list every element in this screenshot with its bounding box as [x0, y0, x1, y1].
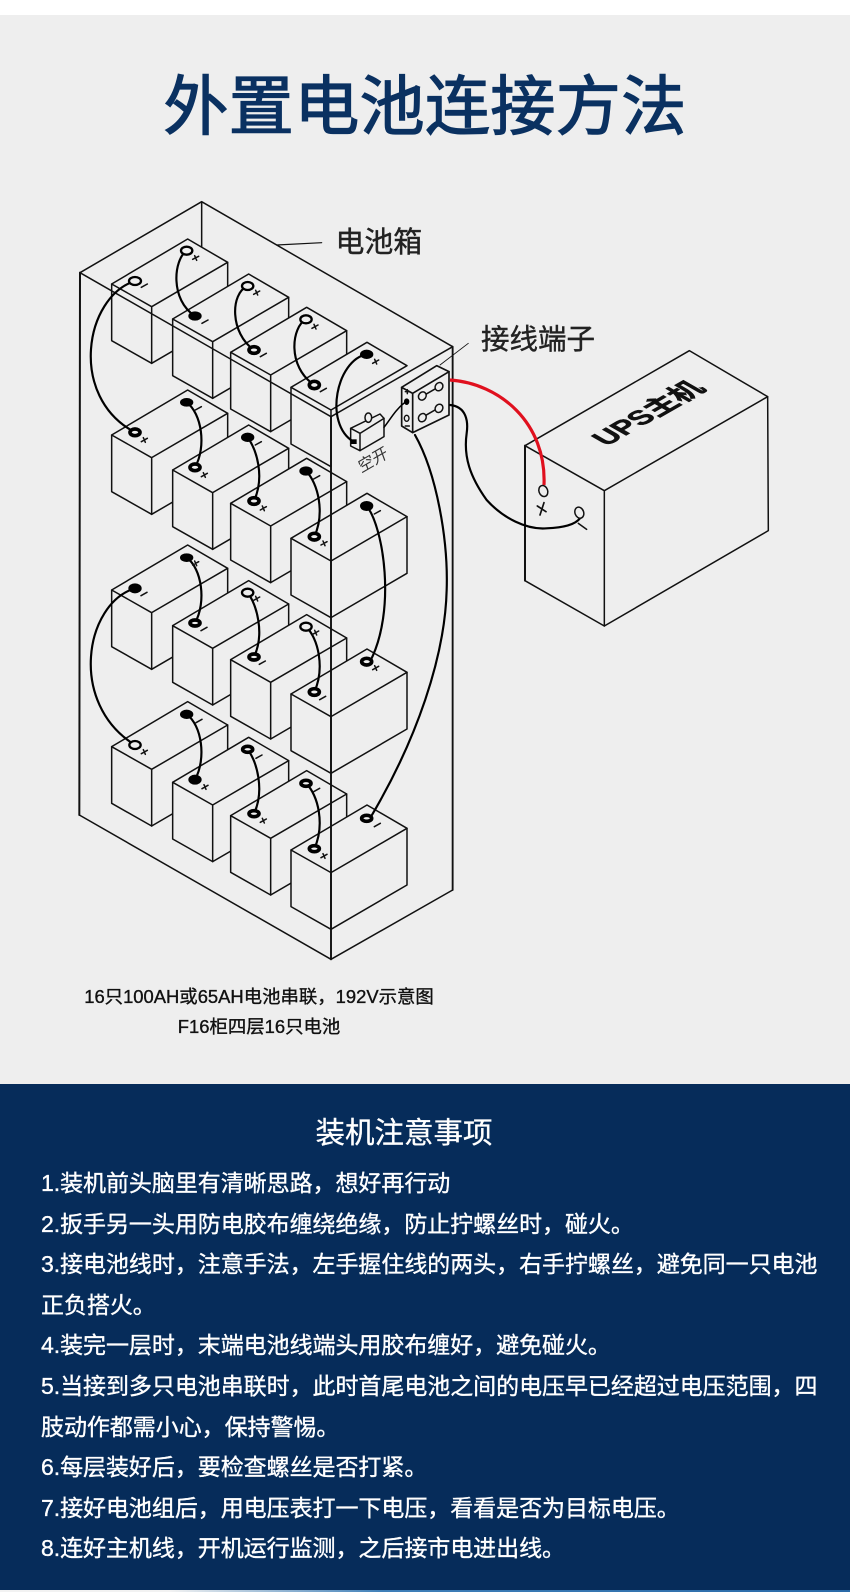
terminal block — [402, 366, 449, 433]
polarity marks — [141, 256, 380, 858]
note 5: 5.当接到多只电池串联时，此时首尾电池之间的电压早已经超过电压范围，四 — [41, 1373, 817, 1399]
bottom gradient strip — [0, 1590, 850, 1592]
panel: diagram background — [0, 15, 850, 1084]
battery cables — [91, 251, 447, 849]
caption line 2: F16柜四层16只电池 — [178, 1016, 340, 1037]
title: 外置电池连接方法 — [163, 70, 687, 143]
note 2: 2.扳手另一头用防电胶布缠绕绝缘，防止拧螺丝时，碰火。 — [41, 1211, 634, 1237]
breaker — [351, 413, 384, 451]
caption line 1: 16只100AH或65AH电池串联，192V示意图 — [84, 986, 434, 1007]
note 4: 4.装完一层时，末端电池线端头用胶布缠好，避免碰火。 — [41, 1332, 611, 1358]
note 5: 肢动作都需小心，保持警惕。 — [41, 1414, 339, 1440]
label: terminal: 接线端子 — [481, 324, 595, 356]
note 7: 7.接好电池组后，用电压表打一下电压，看看是否为目标电压。 — [41, 1495, 680, 1521]
notes heading: 装机注意事项 — [315, 1117, 492, 1150]
note 6: 6.每层装好后，要检查螺丝是否打紧。 — [41, 1454, 427, 1480]
notes list — [41, 1170, 817, 1561]
note 1: 1.装机前头脑里有清晰思路，想好再行动 — [41, 1170, 450, 1196]
negative cable — [450, 405, 580, 528]
panel: installation notes — [0, 1084, 850, 1590]
cabinet back edges — [80, 202, 453, 347]
battery row 4 — [112, 702, 407, 929]
battery row 1 — [112, 239, 407, 467]
note 3: 3.接电池线时，注意手法，左手握住线的两头，右手拧螺丝，避免同一只电池 — [41, 1251, 817, 1277]
UPS label: UPS主机 — [585, 376, 713, 450]
leader lines — [277, 243, 468, 365]
label: battery box: 电池箱 — [336, 227, 422, 259]
battery row 3 — [112, 545, 407, 773]
UPS negative port — [573, 506, 587, 529]
label: breaker: 空开 — [356, 444, 390, 477]
UPS unit — [525, 351, 768, 626]
battery terminals — [129, 247, 373, 852]
cabinet front edges — [79, 273, 453, 959]
note 5 — [41, 1373, 817, 1440]
note 3: 正负搭火。 — [41, 1292, 156, 1318]
note 3 — [41, 1251, 817, 1318]
note 8: 8.连好主机线，开机运行监测，之后接市电进出线。 — [41, 1535, 565, 1561]
positive cable — [450, 380, 544, 485]
battery row 2 — [112, 390, 407, 618]
UPS positive port — [537, 484, 549, 515]
